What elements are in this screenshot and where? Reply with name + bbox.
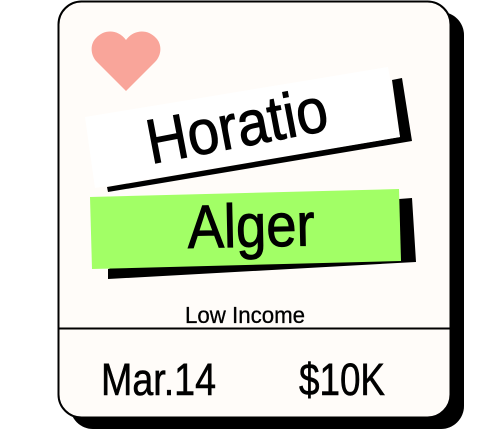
last name banner: [90, 189, 416, 279]
banner shadow: [107, 78, 412, 192]
income category label: Low Income: [185, 302, 305, 328]
card panel: [58, 2, 451, 418]
icon: heart: [92, 31, 160, 91]
banner panel: [85, 67, 400, 188]
amount: $10K: [299, 354, 385, 405]
card shadow: [70, 12, 464, 429]
banner shadow: [108, 198, 416, 279]
date: Mar.14: [101, 354, 216, 405]
first name banner: [85, 67, 412, 192]
first name text: Horatio: [141, 75, 333, 178]
last name text: Alger: [187, 190, 315, 261]
banner panel: [90, 189, 401, 269]
